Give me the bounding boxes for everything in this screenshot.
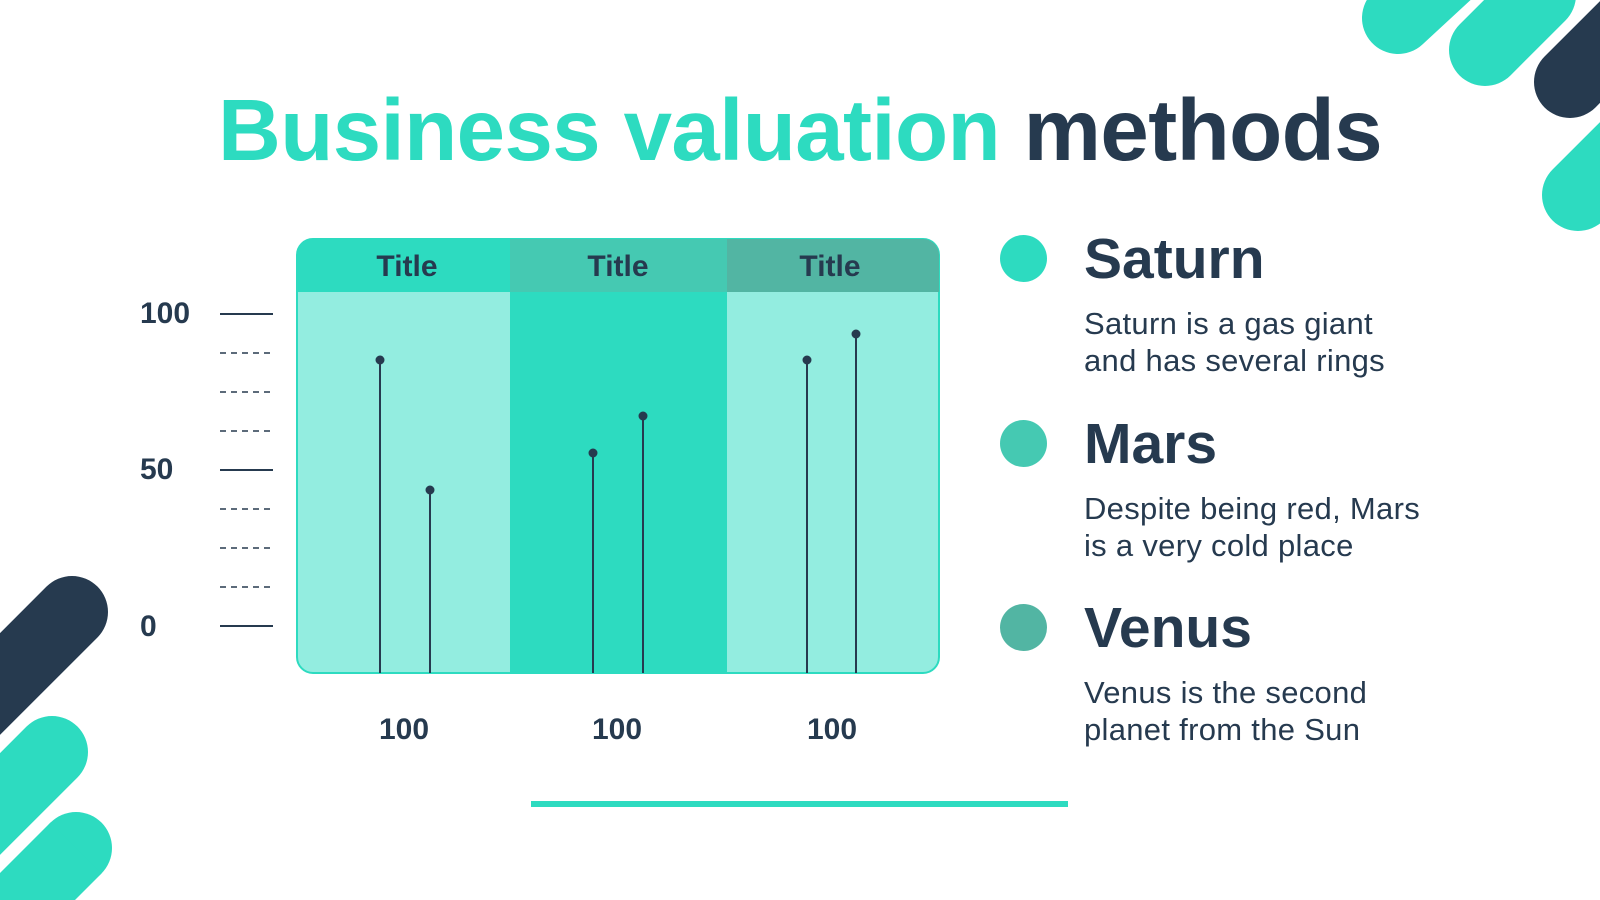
legend: Mars: Mars: [1084, 412, 1217, 476]
legend: Venus: Venus: [1084, 596, 1252, 660]
legend: Saturn: Saturn: [1084, 227, 1265, 291]
stems: [376, 330, 860, 673]
text: 50: [140, 453, 173, 486]
text: 100: [807, 713, 857, 746]
column titles: [376, 250, 861, 283]
bottom line: [531, 801, 1068, 807]
axis ticks: [220, 314, 273, 626]
x labels: 100: [379, 713, 429, 746]
legend: Venus: [1000, 596, 1367, 747]
text: 100: [592, 713, 642, 746]
legend: Mars: [1000, 412, 1420, 563]
legend: Saturn: [1000, 227, 1385, 378]
legend: Mars: Despite being red, Mars: [1084, 491, 1420, 526]
legend: Venus: planet from the Sun: [1084, 712, 1360, 747]
legend: Saturn: and has several rings: [1084, 343, 1385, 378]
column titles: Title: [376, 250, 438, 283]
column titles: Title: [799, 250, 861, 283]
text: 0: [140, 610, 157, 643]
table body: [297, 239, 939, 673]
legend: Venus: Venus is the second: [1084, 675, 1367, 710]
legend: Saturn: Saturn is a gas giant: [1084, 306, 1373, 341]
legend: Mars: is a very cold place: [1084, 528, 1354, 563]
y labels: 100: [140, 297, 190, 330]
column titles: Title: [587, 250, 649, 283]
title: Business valuation methods: [218, 82, 1382, 179]
chart: [220, 238, 940, 674]
